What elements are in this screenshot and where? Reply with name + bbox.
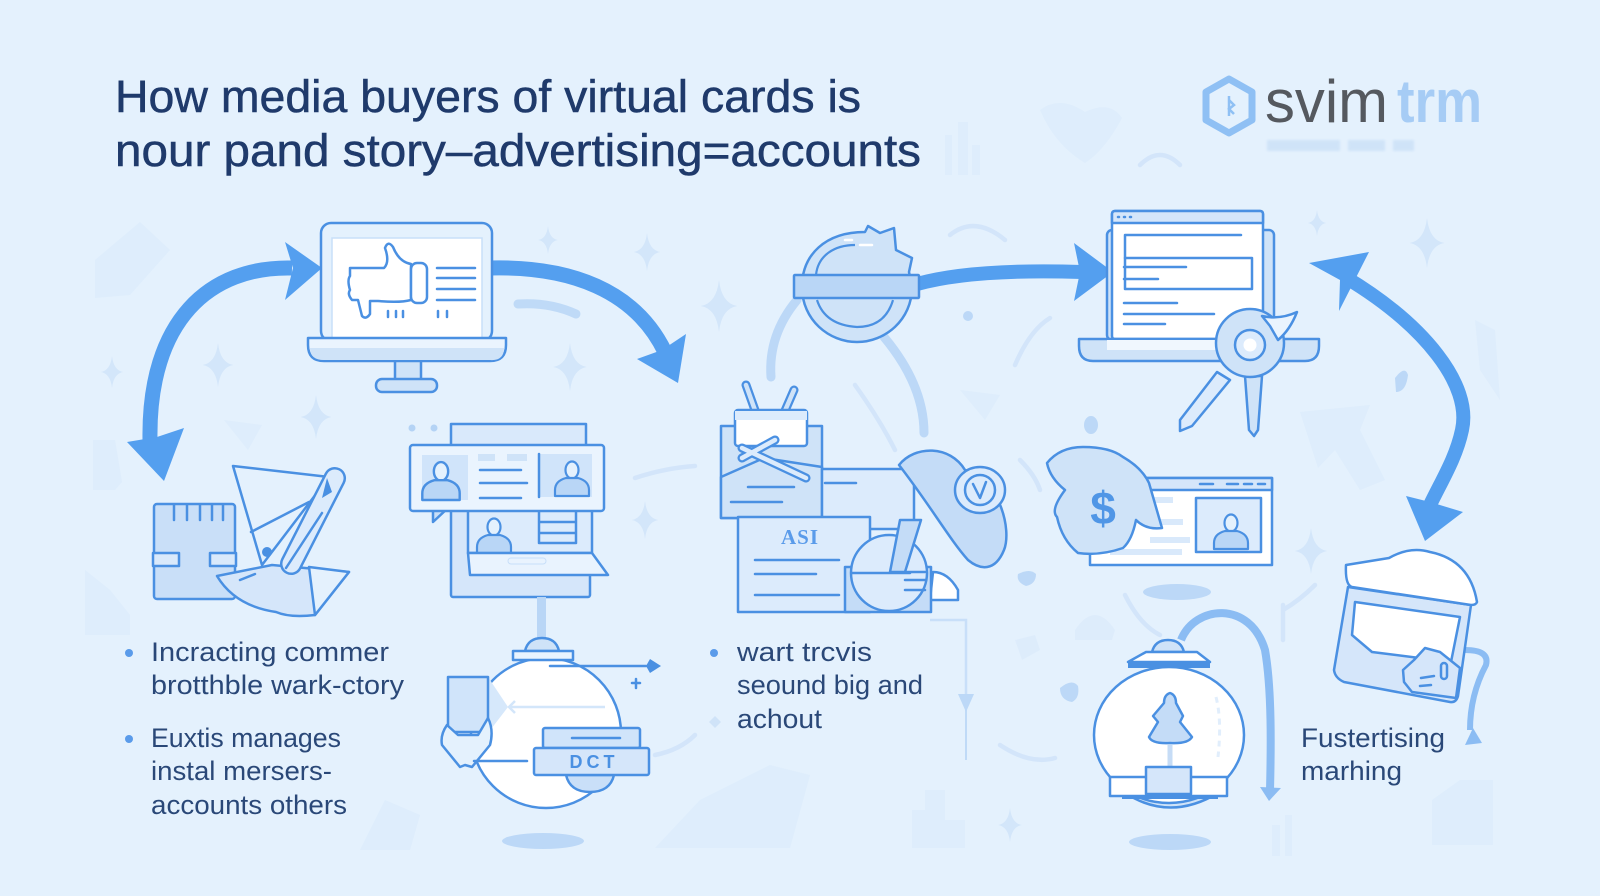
magnifier badge and pens	[1180, 309, 1297, 436]
bullet list: middle	[710, 637, 923, 734]
arrow: monitor to cards curve	[490, 268, 686, 383]
text: right label: Fustertising	[1301, 723, 1445, 753]
bullet list: middle: wart trcvis	[736, 637, 872, 667]
bullet list: left: Euxtis manages	[151, 723, 341, 753]
icon: globe with tree	[1094, 613, 1281, 808]
logo: svim trm: trm	[1397, 68, 1482, 135]
ASI label: ASI	[781, 525, 819, 549]
icon: envelope, document and pie chart	[721, 385, 1006, 612]
arrow: right side double-headed curve	[1309, 252, 1463, 541]
arrow: circle to laptop	[917, 243, 1113, 301]
bullet list: middle: achout	[737, 704, 823, 734]
bullet list: left: accounts others	[151, 790, 347, 820]
icon: money bag and browser	[1047, 447, 1272, 565]
icon: circle with band	[771, 226, 924, 433]
title: How media buyers of virtual cards is	[115, 71, 861, 122]
arrow: top left curve double-headed	[127, 242, 322, 481]
icon: profile cards	[408, 424, 608, 597]
text: right label	[1301, 723, 1445, 786]
icon: notebook, paper and pen	[153, 465, 349, 616]
icon: globe with DCT label	[442, 638, 661, 808]
text: right label: marhing	[1301, 756, 1402, 786]
thumb hand	[348, 244, 427, 318]
DCT label	[534, 748, 649, 775]
title: nour pand story–advertising=accounts	[115, 125, 921, 176]
logo: svim trm	[1206, 68, 1482, 151]
bullet list: left: instal mersers-	[151, 756, 332, 786]
DCT label: DCT	[570, 752, 618, 772]
bullet list: left	[125, 637, 405, 820]
bullet list: middle: seound big and	[737, 670, 923, 700]
bullet list: left: Incracting commer	[151, 637, 389, 667]
bullet list: left: brotthble wark-ctory	[151, 670, 405, 700]
screen text lines	[437, 268, 475, 300]
dollar sign: $	[1090, 482, 1116, 534]
icon: jar with card	[1334, 550, 1487, 745]
title	[115, 71, 921, 176]
connector line	[537, 597, 546, 641]
icon: monitor with thumbs	[308, 223, 506, 392]
logo: svim trm: svim	[1265, 68, 1388, 135]
icon: laptop with document and magnifier	[1079, 211, 1319, 436]
